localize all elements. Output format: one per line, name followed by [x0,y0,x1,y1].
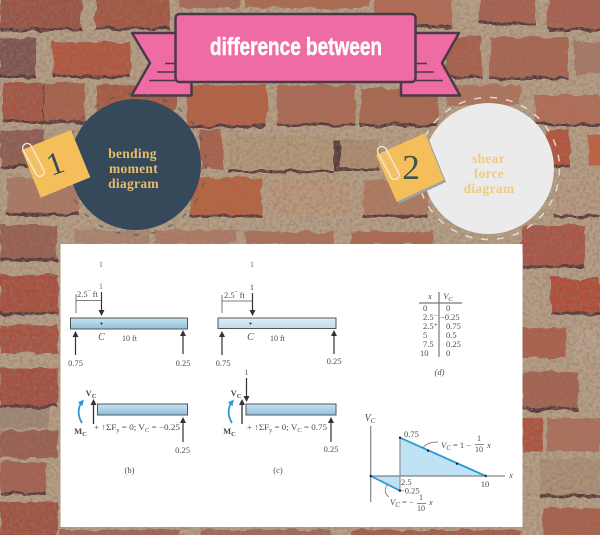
table (d): 5 [423,330,427,340]
shear force chart: 10 [481,479,489,489]
free body diagram (c): C [297,428,302,434]
free body diagram (b): 0.25 [175,445,190,455]
table (d): 0.5 [446,330,457,340]
table (d): 10 [420,348,428,358]
table (d): 0 [423,303,427,313]
dark circle [70,99,201,230]
table (d): V [443,291,448,301]
free body diagram (c): C [237,393,242,400]
label: bending moment diagram: bending [108,146,157,161]
table (d): 2.5⁻ [423,312,439,322]
title: difference between [210,33,382,61]
panel: bending moment diagram [21,94,206,235]
diagram b: beam with second section: 0.25 [327,356,341,366]
free body diagram (b): (b) [125,465,135,475]
table (d): 0.25 [446,339,461,349]
dashed ring [65,94,206,235]
free body diagram (b): = 0; V [120,422,146,432]
dashed ring [418,98,560,240]
diagram b: beam with second section: 1 [250,259,254,269]
shear force chart: 10 [417,504,425,513]
light circle [423,103,554,234]
shear force chart: 1 [477,434,481,443]
shear force chart: V [390,497,395,507]
free body diagram (c): (c) [273,465,283,475]
shear force chart: = 1 − [451,440,471,450]
shear force chart: x [428,497,433,507]
table (d): 2.5⁺ [423,321,439,331]
icon: paperclip [21,142,46,178]
banner [132,14,460,96]
shear force chart: C [371,417,376,425]
shear force chart: C [395,501,400,509]
diagram a: full beam: 0.75 [68,358,83,368]
free body diagram (b): M [74,426,82,436]
diagram b: beam with second section: 10 ft [270,334,286,343]
shear force chart: 1 [419,493,423,502]
right ribbon tail [401,33,460,96]
label: shear force diagram: shear [472,151,505,166]
shear force chart: = − [400,497,414,507]
left ribbon tail [132,33,192,96]
label: bending moment diagram: moment [109,161,158,176]
free body diagram (b) [74,388,190,475]
free body diagram (b): C [92,393,97,400]
free body diagram (c): = 0.75 [302,422,327,432]
table (d): 7.5 [423,339,434,349]
diagram a: full beam: 10 ft [122,334,138,343]
free body diagram (c): C [231,431,236,438]
table (d): C [448,296,453,303]
table (d) [419,291,462,377]
shear force chart [365,413,513,513]
free body diagram (c): 1 [244,367,249,377]
sticky note 2 [376,133,446,204]
sticky note 1 [22,130,90,198]
shear force chart: V [441,440,446,450]
shear force chart: 0.75 [404,429,419,439]
free body diagram (c): V [231,388,237,398]
white diagram panel [60,244,522,527]
number 2: 2 [402,148,420,187]
free body diagram (c) [223,367,338,475]
free body diagram (b): = −0.25 [149,422,180,432]
number 1: 1 [41,143,69,183]
shear force chart: C [446,444,451,452]
label: shear force diagram: force [474,166,504,181]
label: shear force diagram: diagram [464,181,515,196]
shear force chart: x [486,440,491,450]
table (d): 0 [446,303,450,313]
diagram b: beam with second section: C [247,332,254,343]
table (d): 0 [446,348,450,358]
shear force chart: 2.5 [401,477,412,487]
table (d): −0.25 [440,312,460,322]
diagram b: beam with second section [216,259,341,368]
diagram a: full beam: 0.25 [176,358,190,368]
free body diagram (b): y [116,428,120,434]
free body diagram (c): + ↑ΣF [247,422,268,432]
diagram a: full beam [68,259,190,368]
diagram b: beam with second section: 0.75 [216,358,230,368]
diagram a: full beam: 2.5‾ ft [77,289,98,299]
free body diagram (b): + ↑ΣF [94,422,115,432]
shear force chart: 10 [475,445,483,454]
icon: paperclip [376,145,401,181]
free body diagram (c): 0.25 [324,444,338,454]
diagram b: beam with second section: 2.5‾ ft [224,290,245,300]
table (d): 0.75 [446,321,461,331]
label: bending moment diagram: diagram [108,176,159,191]
diagram b: beam with second section: 1 [250,282,254,292]
shear force chart: x [508,470,513,480]
banner main plate [176,14,416,82]
table (d): x [427,291,432,301]
free body diagram (c): = 0; V [272,422,298,432]
free body diagram (c): M [223,426,231,436]
shear force chart: V [365,413,371,424]
free body diagram (b): V [86,388,92,398]
table (d): (d) [435,367,445,377]
panel: shear force diagram [376,98,560,240]
free body diagram (b): C [145,428,149,434]
shear force chart: −0.25 [400,486,420,496]
diagram a: full beam: 1 [99,259,103,269]
diagram a: full beam: 1 [99,281,103,291]
free body diagram (b): C [82,431,87,438]
diagram a: full beam: C [98,332,105,343]
free body diagram (c): y [269,428,272,434]
